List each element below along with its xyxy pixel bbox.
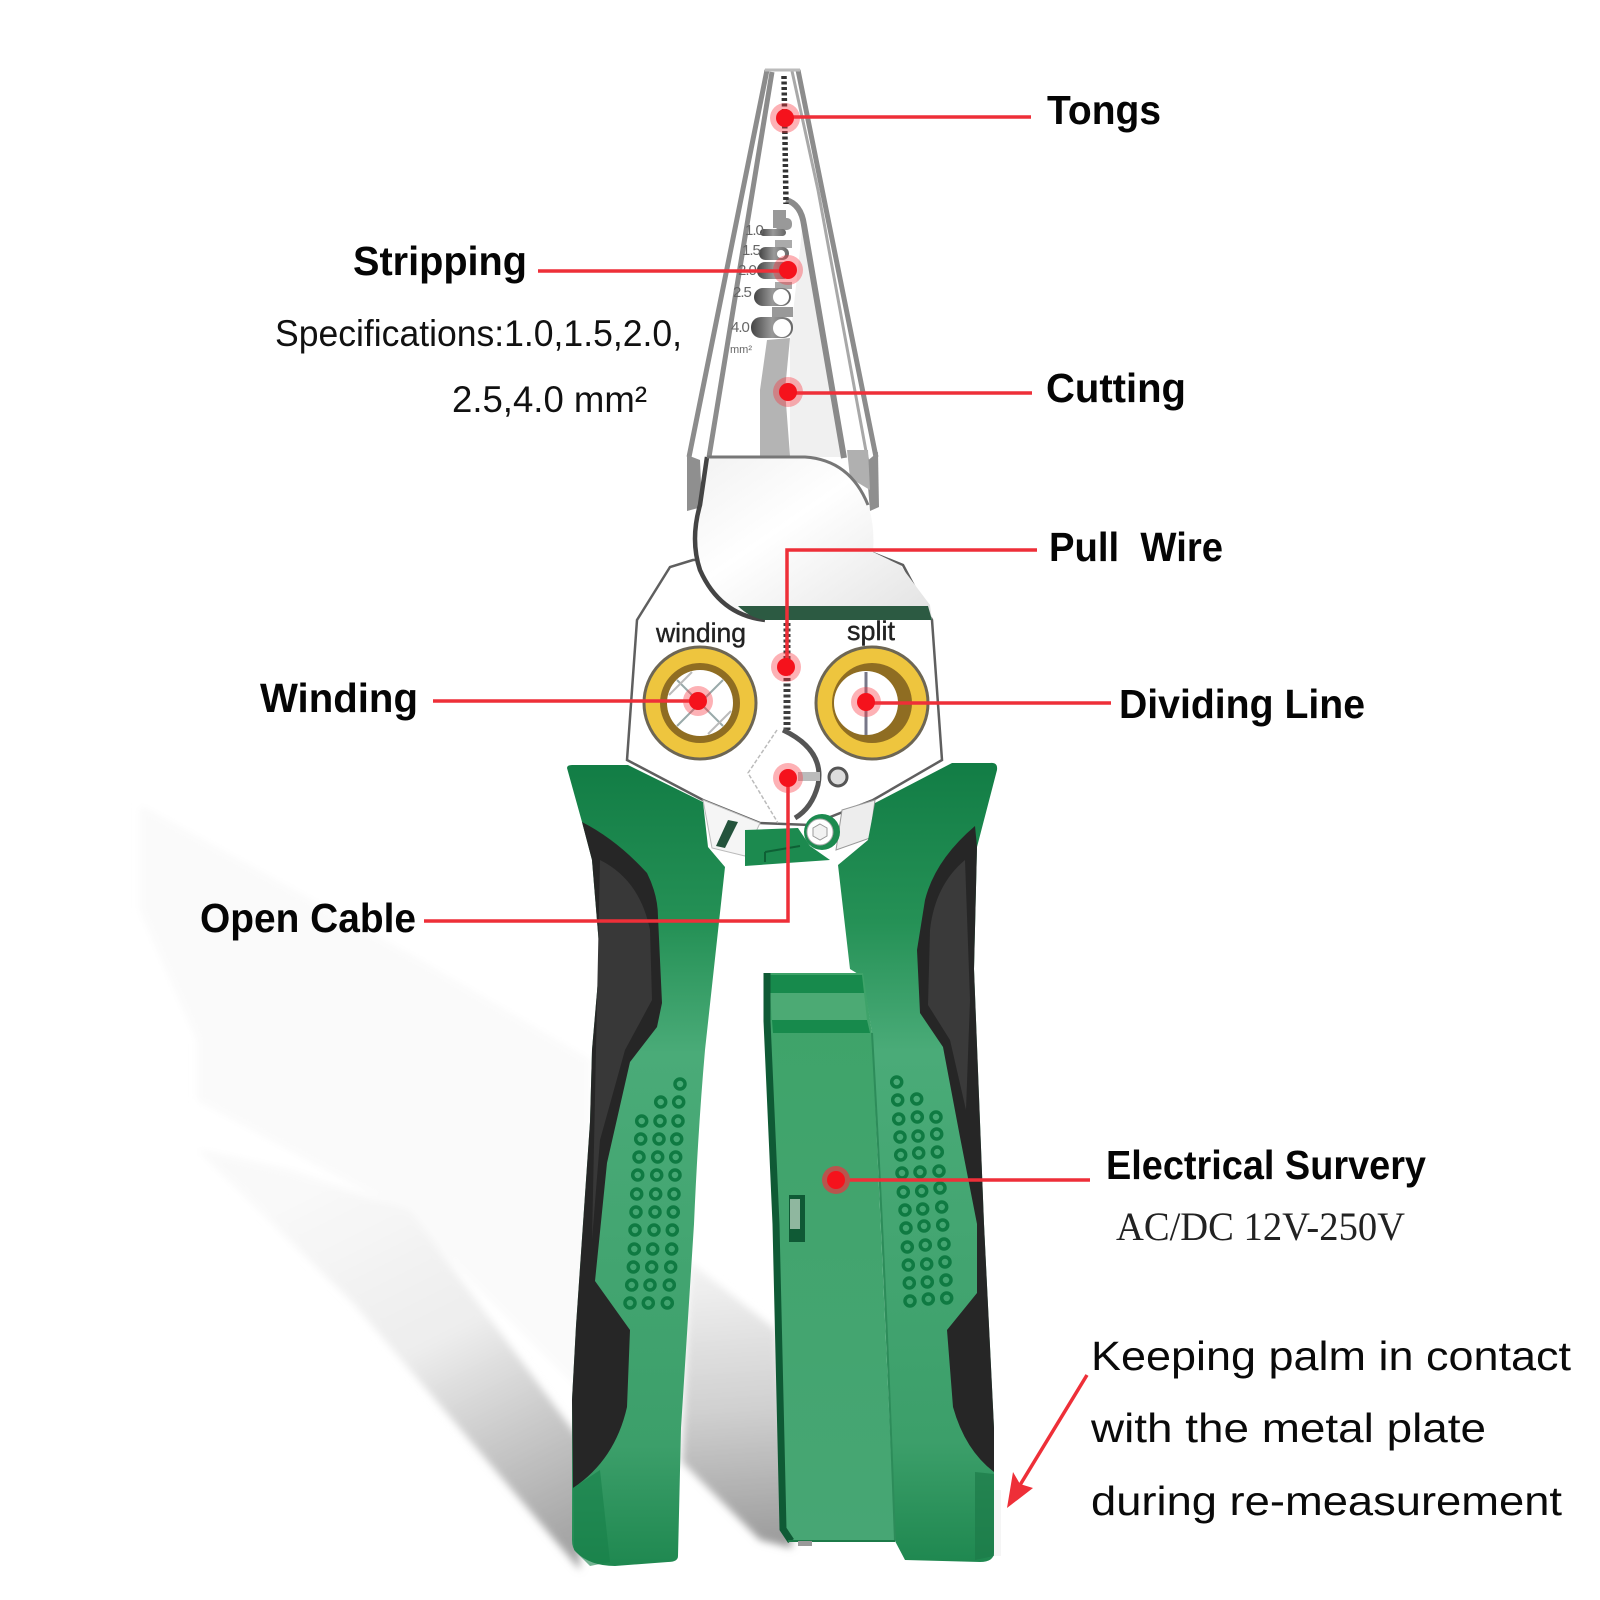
stripping scale numbers (730, 222, 764, 356)
label: Dividing Line: Dividing Line (1119, 681, 1365, 727)
tip serration (784, 76, 786, 204)
label: Electrical Survery: Electrical Survery (1106, 1142, 1426, 1188)
metal spring right (836, 800, 875, 850)
stripping scale numbers: 1.5 (742, 242, 761, 259)
upper body (695, 457, 932, 620)
tester box (764, 973, 895, 1546)
label: Open Cable: Open Cable (200, 895, 416, 941)
battery door foot (798, 1541, 812, 1546)
label: split: split (847, 616, 895, 646)
callout: Tongs pointer (770, 103, 1031, 133)
label: winding: winding (655, 618, 746, 648)
cutting blade (760, 338, 790, 456)
label: Stripping: Stripping (353, 238, 527, 284)
callout: Stripping pointer (538, 255, 803, 285)
ring: split (816, 647, 928, 759)
head plate (627, 553, 942, 825)
metal plate (994, 1490, 1001, 1556)
callout: Dividing Line pointer (851, 687, 1111, 717)
cable opener (748, 730, 847, 823)
lock slider (745, 814, 840, 866)
center serration (784, 623, 790, 730)
USB clip (789, 1195, 805, 1242)
stripping holes (730, 210, 793, 356)
stripping scale numbers: mm² (730, 344, 752, 356)
jaw (687, 70, 879, 512)
left handle (567, 765, 725, 1566)
stripping scale numbers: 1.0 (745, 222, 764, 239)
callout: Electrical Survery pointer (822, 1166, 1090, 1194)
note: palm contact: with the metal plate (1090, 1405, 1486, 1451)
callout: Winding pointer (433, 686, 713, 716)
callout: Pull Wire pointer (771, 550, 1037, 682)
text: voltage range: AC/DC 12V-250V (1116, 1204, 1405, 1249)
label: Tongs: Tongs (1047, 87, 1161, 133)
dark strip (738, 606, 932, 620)
metal spring left (703, 800, 760, 856)
stripping scale numbers: 2.0 (738, 262, 757, 279)
pliers illustration (567, 70, 1001, 1566)
callout: Cutting pointer (773, 377, 1032, 407)
grip dots: left (625, 1079, 685, 1308)
arrow: to metal plate (1007, 1375, 1087, 1508)
stripping scale numbers: 2.5 (733, 284, 752, 301)
product shadow (140, 805, 792, 1570)
label: Cutting: Cutting (1046, 365, 1186, 411)
label: Winding: Winding (260, 675, 418, 721)
callout: Open Cable pointer (424, 763, 803, 921)
right handle (838, 763, 997, 1562)
text: specifications: Specifications:1.0,1.5,2.0, (275, 313, 682, 354)
grip dots: right (892, 1077, 952, 1306)
label: Pull Wire: Pull Wire (1049, 524, 1223, 570)
stripping scale numbers: 4.0 (731, 319, 750, 336)
text: specifications (275, 313, 682, 420)
note: palm contact: Keeping palm in contact (1091, 1333, 1572, 1379)
text: specifications: 2.5,4.0 mm² (452, 379, 647, 420)
note: palm contact (1090, 1333, 1572, 1524)
note: palm contact: during re-measurement (1091, 1478, 1563, 1524)
ring: winding (644, 647, 756, 759)
